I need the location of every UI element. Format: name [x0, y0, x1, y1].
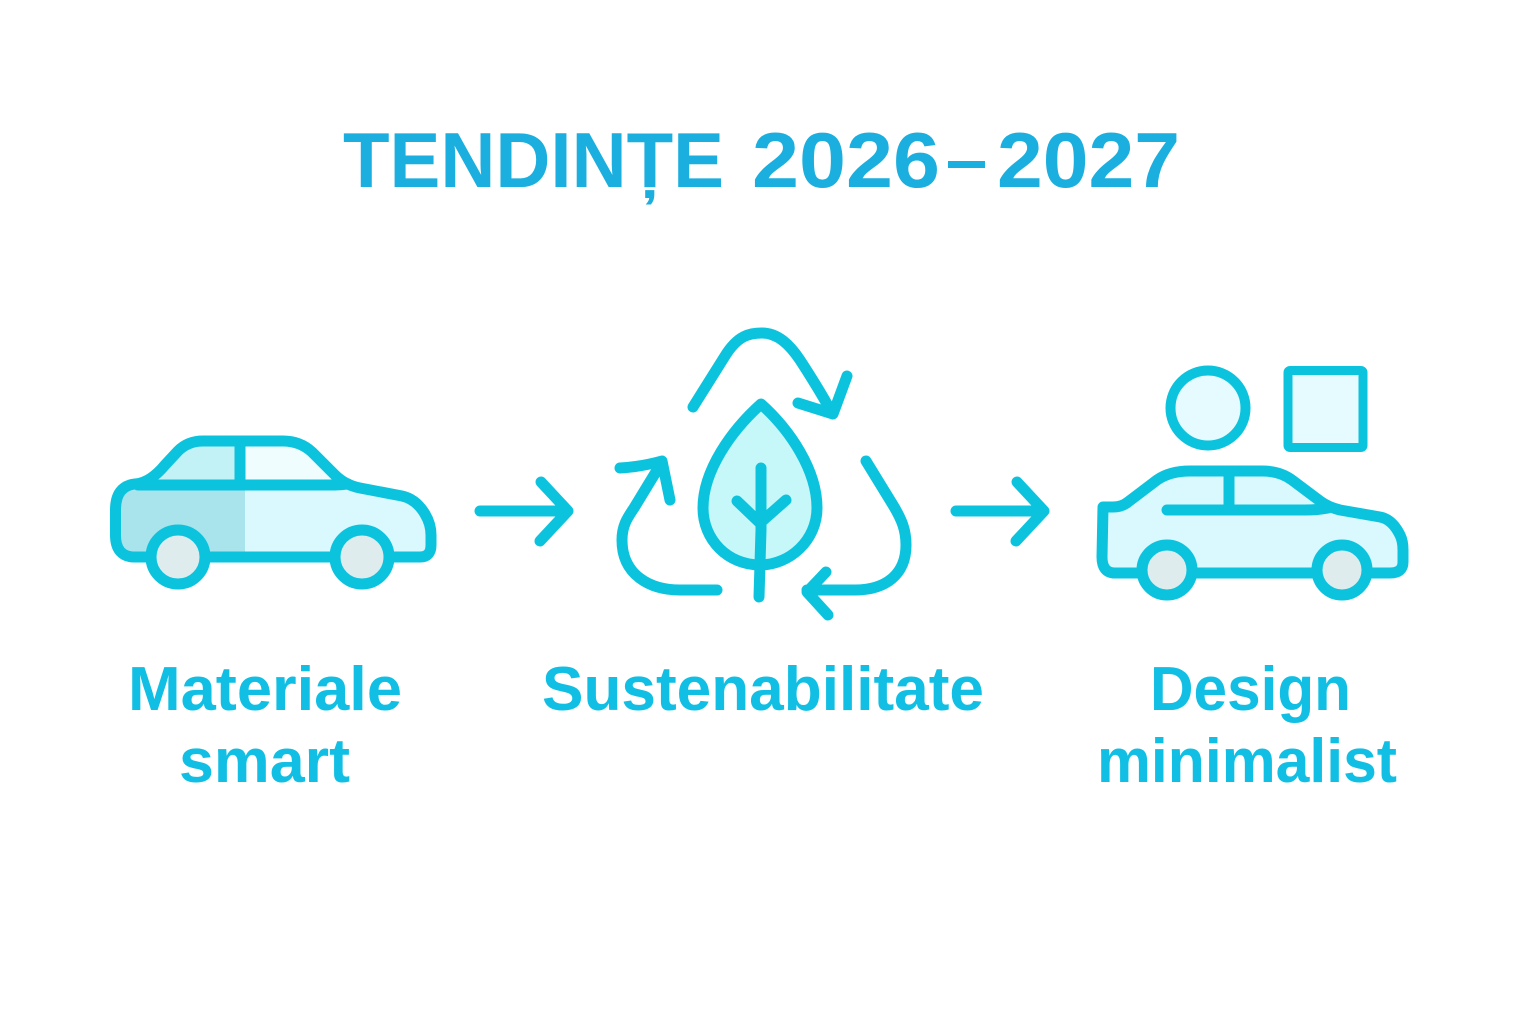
recycling arrow: right	[807, 461, 906, 615]
title	[343, 116, 1180, 205]
leaf	[703, 404, 817, 565]
car body	[1102, 471, 1403, 573]
square shape	[1288, 370, 1363, 448]
icon: recycling loop with leaf	[620, 333, 906, 615]
title: 2027	[997, 116, 1180, 204]
title: TENDINȚE	[343, 116, 724, 205]
label: Sustenabilitate: Sustenabilitate	[542, 655, 984, 724]
arrow: sustainability to minimalist design	[956, 482, 1044, 541]
recycling arrow: top	[693, 333, 847, 414]
circle shape	[1170, 370, 1246, 446]
label: Design minimalist	[1097, 655, 1397, 796]
icon: minimalist car with shapes	[1102, 370, 1403, 595]
title: 2026	[752, 116, 940, 204]
icon: car with smart materials	[116, 441, 431, 584]
label: Materiale smart: smart	[179, 727, 350, 796]
recycling arrow: left	[620, 461, 717, 590]
label: Materiale smart: Materiale	[128, 655, 402, 724]
label: Materiale smart	[128, 655, 402, 796]
label: Design minimalist: minimalist	[1097, 727, 1397, 796]
arrow: materials to sustainability	[480, 482, 568, 541]
label: Design minimalist: Design	[1150, 655, 1351, 724]
